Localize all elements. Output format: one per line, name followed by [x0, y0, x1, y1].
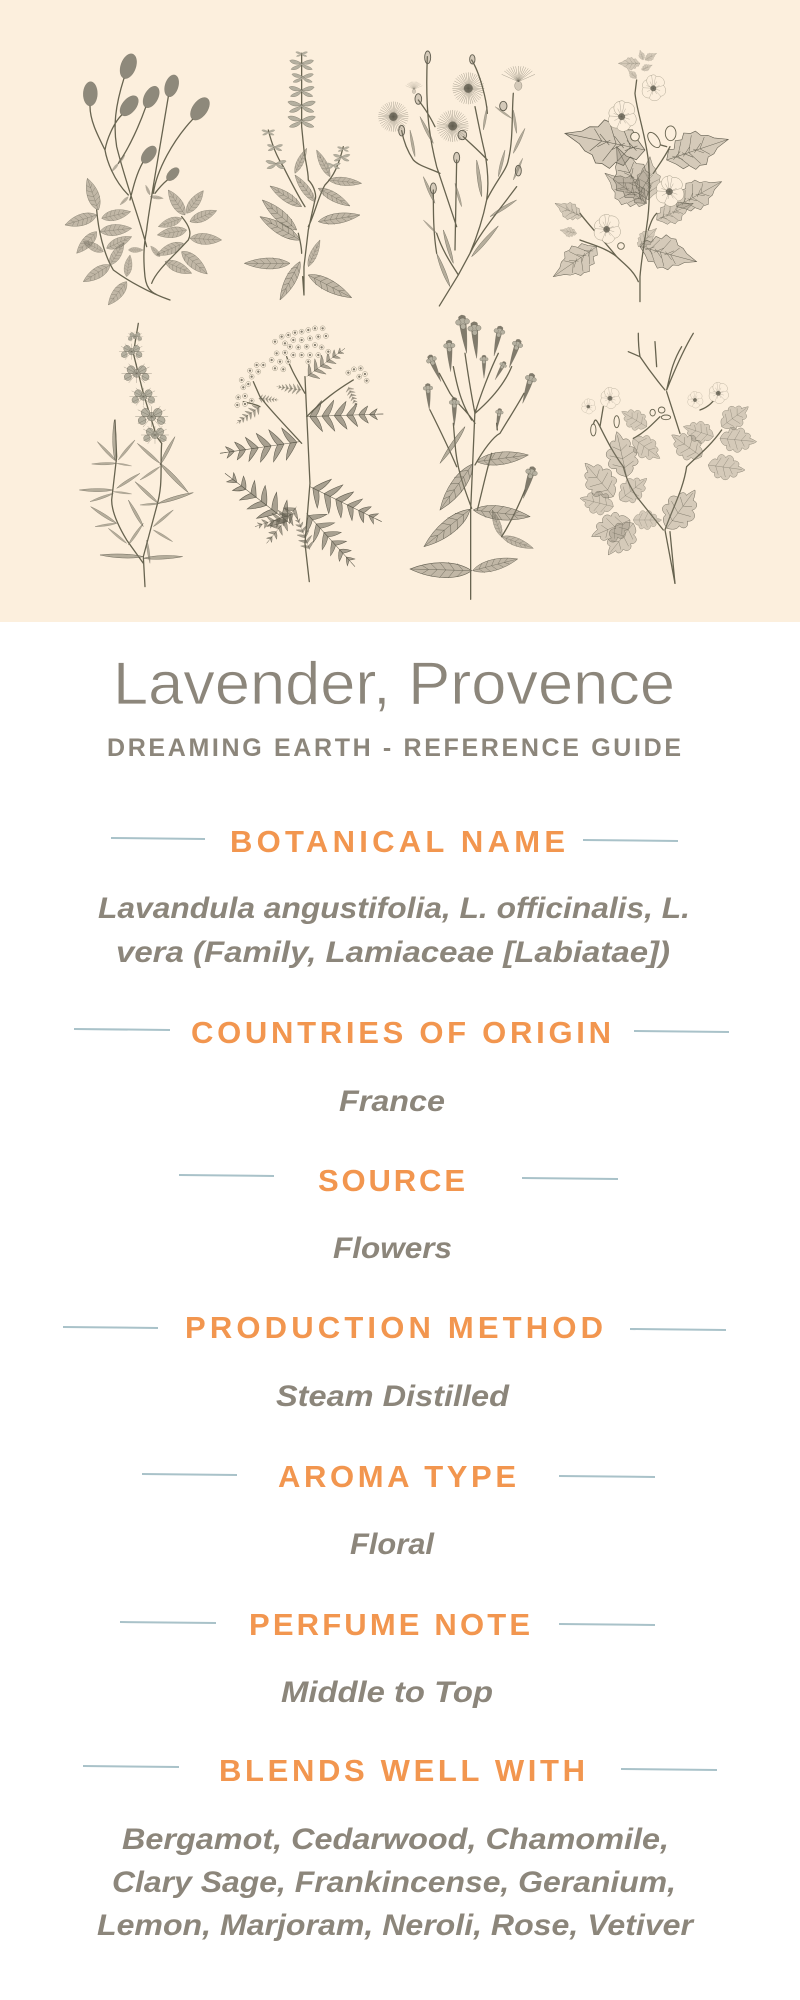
text: botanical name value: vera (Family, Lamiaceae [Labiatae])	[116, 936, 670, 969]
plant: burnet with oval flower heads	[63, 51, 222, 308]
heading: production method: PRODUCTION METHOD	[185, 1310, 603, 1345]
subtitle: DREAMING EARTH - REFERENCE GUIDE	[107, 734, 681, 762]
section: perfume note	[120, 1607, 655, 1709]
plant: vervain with spikes	[410, 314, 539, 599]
heading: botanical name: BOTANICAL NAME	[230, 824, 565, 859]
heading: source: SOURCE	[318, 1163, 465, 1198]
plant: cornflower	[378, 51, 535, 306]
section: countries of origin	[74, 1015, 729, 1118]
text: blends value: Lemon, Marjoram, Neroli, Rose, Vetiver	[97, 1909, 695, 1942]
illustration panel: botanical plants	[0, 0, 800, 622]
heading: countries of origin: COUNTRIES OF ORIGIN	[191, 1015, 611, 1050]
text: origin value: France	[339, 1085, 445, 1118]
plant: celandine with lobed leaves	[574, 333, 758, 583]
text: botanical name value: Lavandula angustifolia, L. officinalis, L.	[98, 892, 690, 925]
heading: aroma type: AROMA TYPE	[278, 1459, 516, 1494]
plant: sage with flower spike	[244, 52, 362, 303]
title: Lavender, Provence	[113, 650, 675, 717]
text: aroma type value: Floral	[350, 1528, 435, 1561]
heading: blends well with: BLENDS WELL WITH	[219, 1753, 585, 1788]
text: blends value: Clary Sage, Frankincense, Geranium,	[112, 1866, 676, 1899]
text: blends value: Bergamot, Cedarwood, Chamomile,	[122, 1823, 669, 1856]
section: botanical name	[98, 824, 690, 969]
text: production method value: Steam Distilled	[276, 1380, 510, 1413]
text: source value: Flowers	[333, 1232, 452, 1265]
plant: hyssop with narrow leaves	[79, 323, 194, 587]
section: production method	[63, 1310, 726, 1413]
section: blends well with	[83, 1753, 717, 1942]
heading: perfume note: PERFUME NOTE	[249, 1607, 530, 1642]
plant: mallow with flowers	[545, 49, 734, 302]
plant: tansy with feathery fronds	[215, 326, 389, 582]
section: aroma type	[142, 1459, 655, 1561]
text: perfume note value: Middle to Top	[281, 1676, 493, 1709]
section: source	[179, 1163, 618, 1265]
